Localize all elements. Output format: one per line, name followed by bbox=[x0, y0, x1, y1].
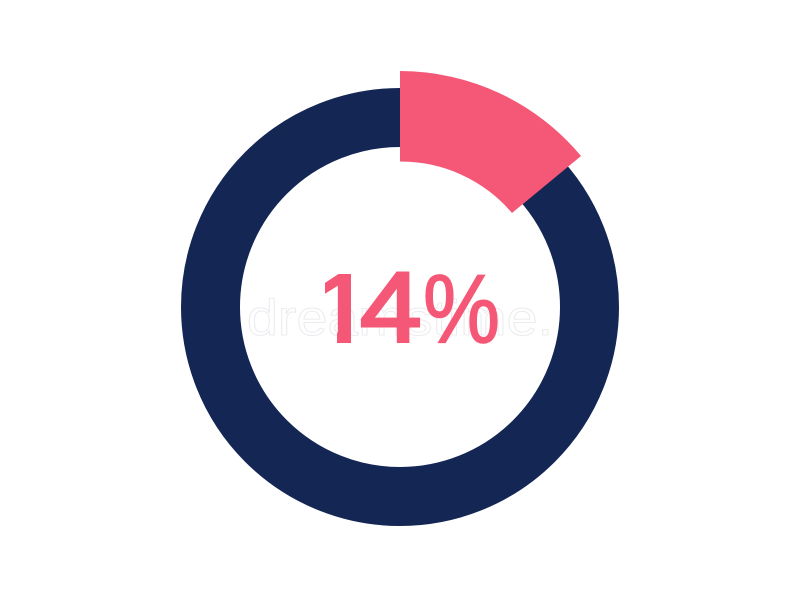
digit 4: 4 bbox=[360, 253, 422, 363]
watermark: dreamstime. bbox=[247, 290, 553, 346]
percent sign: % bbox=[423, 254, 500, 364]
donut chart: 14 percent bbox=[181, 71, 619, 526]
donut ring: navy remainder bbox=[210, 118, 590, 496]
percentage label bbox=[325, 272, 498, 344]
highlighted segment: 14 percent bbox=[400, 71, 581, 213]
digit 1: 1 bbox=[314, 253, 370, 365]
